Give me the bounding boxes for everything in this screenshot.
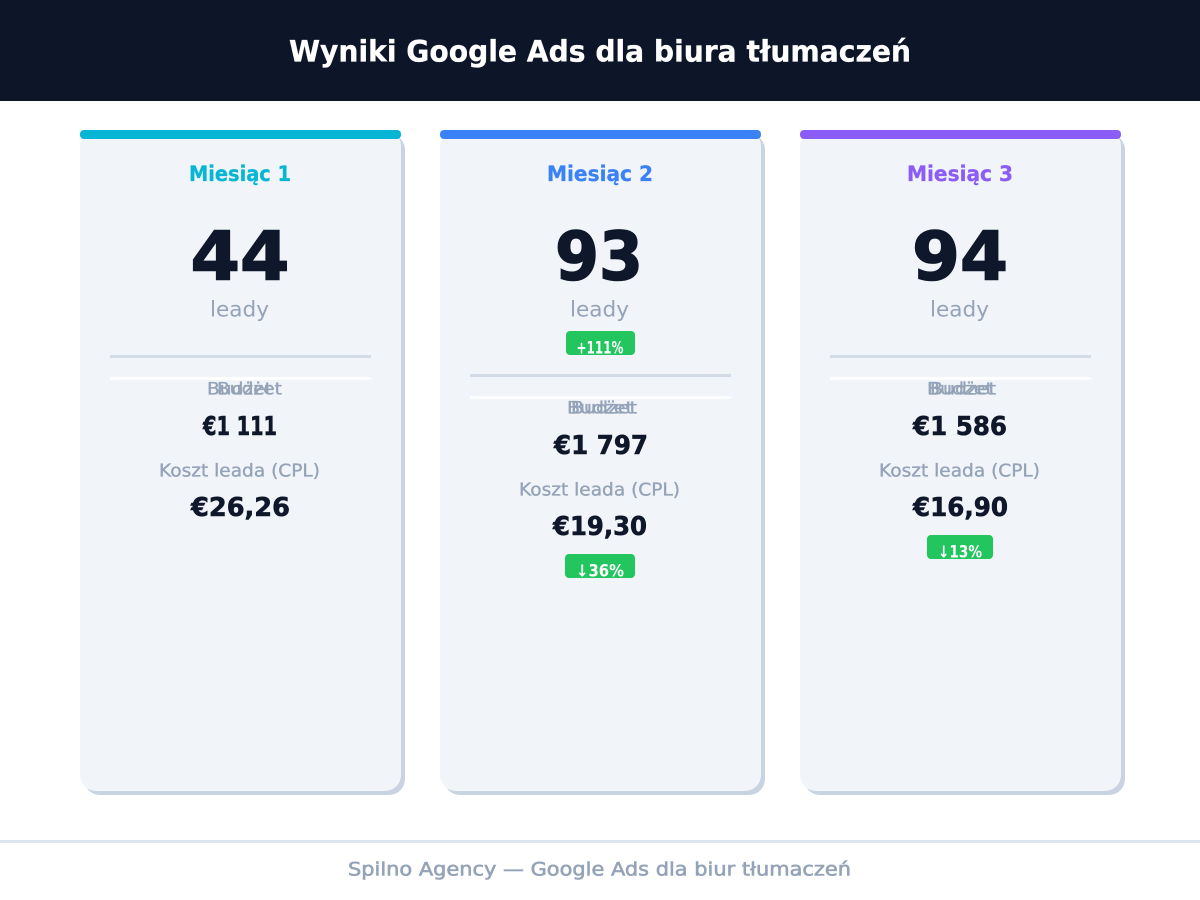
month 1 CPL value: €26,26 [190,493,290,523]
footer: Spilno Agency — Google Ads dla biur tłumaczeń [348,858,851,880]
header band [0,0,1200,101]
month 2 CPL value: €19,30 [552,512,647,542]
month 3 CPL change badge [927,535,993,562]
month 2 leads growth badge [566,331,635,358]
month 3 budget label: Budżet [927,380,994,398]
month 1 budget label: Budżet [207,380,273,398]
panel: month 1 [80,130,405,795]
month 1 leads value: 44 [190,218,290,296]
month 2 CPL label: Koszt leada (CPL) [519,480,680,500]
panel: month 3 [800,130,1125,795]
month 3 leads label: leady [930,298,989,322]
month 3 CPL change badge: ↓13% [938,542,982,562]
month 3 budget label: Budżet [930,380,997,398]
month 1 budget label: Budżet [217,380,283,398]
month 1 budget value: €1 111 [202,412,277,442]
month 3 CPL label: Koszt leada (CPL) [879,462,1040,482]
month 2 CPL change badge: ↓36% [576,562,624,580]
month 1 leads label: leady [210,298,269,322]
month 1 heading: Miesiąc 1 [189,162,291,186]
month 2 budget label: Budżet [567,398,634,418]
month 2 leads value: 93 [555,218,643,296]
month 2 CPL change badge [565,554,635,580]
month 2 heading: Miesiąc 2 [547,162,653,186]
month 2 budget value: €1 797 [553,431,648,461]
month 3 leads value: 94 [912,218,1008,296]
month 3 heading: Miesiąc 3 [907,162,1013,186]
month 2 leads growth badge: +111% [576,338,624,358]
month 2 leads label: leady [570,298,629,322]
title: Wyniki Google Ads dla biura tłumaczeń [289,34,911,68]
month 2 budget label: Budżet [571,398,638,418]
month 3 budget value: €1 586 [912,412,1007,442]
month 1 CPL label: Koszt leada (CPL) [159,462,320,482]
month 3 CPL value: €16,90 [912,493,1008,523]
panel: month 2 [440,130,765,795]
